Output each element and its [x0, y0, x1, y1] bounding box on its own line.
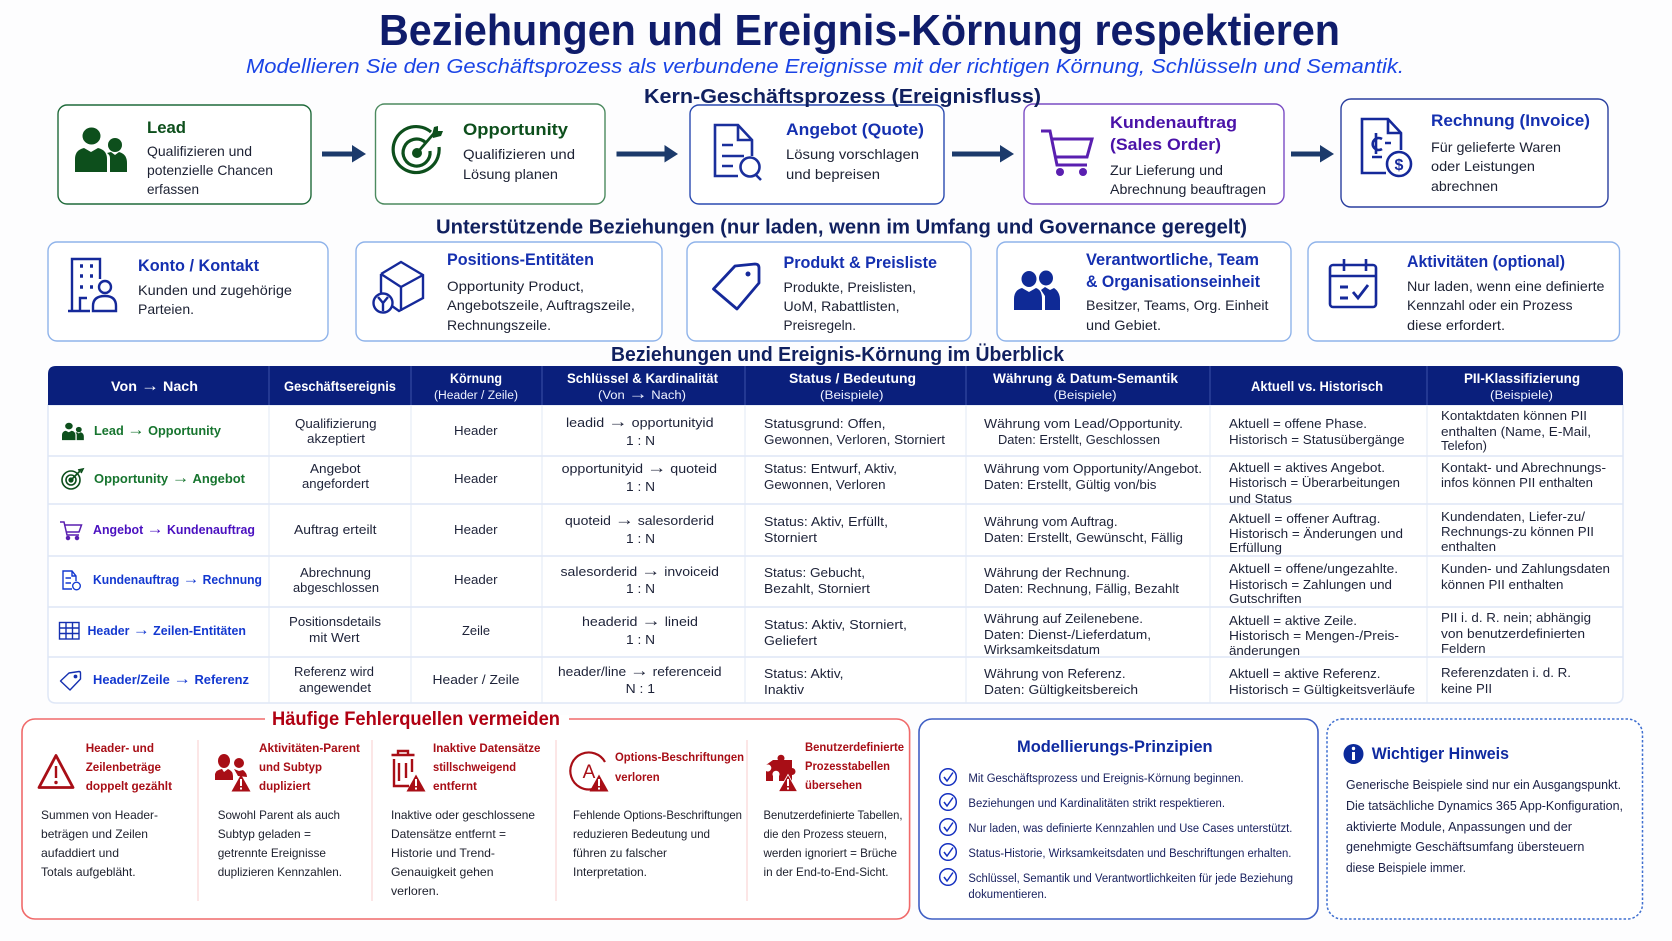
- card: Lead: [58, 105, 311, 204]
- error title: stillschweigend: [433, 760, 516, 774]
- row: Lead to Opportunity: Kontaktdaten können PII: [1441, 409, 1587, 423]
- heading: supporting relationships: Unterstützende Beziehungen (nur laden, wenn im Umfang und Governance geregelt): [436, 216, 1247, 238]
- row: Opportunity to Angebot: Kontakt- und Abrechnungs-: [1441, 461, 1606, 475]
- row: Opportunity to Angebot: [62, 458, 1606, 506]
- heading: Produkt: Produkt & Preisliste: [784, 253, 937, 272]
- panel: important note: [1327, 719, 1642, 919]
- row: Angebot to Kundenauftrag: Erfüllung: [1229, 541, 1282, 555]
- row: Kundenauftrag to Rechnung: Aktuell = offene/ungezahlte.: [1229, 562, 1398, 576]
- row: Lead to Opportunity: leadid → opportunityid: [566, 412, 714, 431]
- text: Rechnung description: abrechnen: [1431, 178, 1498, 194]
- row: Header/Zeile to Referenz: Referenzdaten i. d. R.: [1441, 666, 1571, 680]
- error text: [41, 808, 158, 879]
- icon: shopping cart: [1041, 131, 1092, 176]
- error text: Datensätze entfernt =: [391, 827, 506, 841]
- error title: verloren: [615, 770, 660, 784]
- row: Opportunity to Angebot: und Status: [1229, 492, 1292, 506]
- text: Produkt description: [784, 279, 916, 333]
- error text: aufaddiert und: [41, 846, 119, 860]
- row: Header to Zeilen-Entitäten: 1 : N: [626, 633, 655, 647]
- error title: Options-Beschriftungen: [615, 750, 744, 764]
- heading: table overview: Beziehungen und Ereignis-Körnung im Überblick: [611, 343, 1065, 366]
- text: Opportunity description: Qualifizieren und: [463, 146, 575, 162]
- row label: Angebot → Kundenauftrag: [93, 519, 255, 538]
- row: Angebot to Kundenauftrag: Daten: Erstellt, Gewünscht, Fällig: [984, 531, 1183, 545]
- error: option labels lost: [570, 750, 744, 879]
- title: Beziehungen und Ereignis-Körnung respektieren: [379, 6, 1340, 55]
- row: Lead to Opportunity: [62, 409, 1591, 453]
- heading: Konto: Konto / Kontakt: [138, 256, 259, 275]
- row: Opportunity to Angebot: Status: Entwurf, Aktiv,: [764, 462, 897, 476]
- table header: Geschäftsereignis: [284, 379, 396, 394]
- heading: Verantwortliche: & Organisationseinheit: [1086, 272, 1260, 291]
- row: Header to Zeilen-Entitäten: Wirksamkeitsdatum: [984, 643, 1100, 657]
- error text: Benutzerdefinierte Tabellen,: [764, 808, 902, 822]
- arrow: Kundenauftrag to Rechnung: [1291, 145, 1334, 162]
- error title: [86, 741, 172, 793]
- table header: [48, 366, 1623, 405]
- icon: price tag: [714, 264, 759, 309]
- text: Angebot description: Lösung vorschlagen: [786, 146, 919, 162]
- card: Konto / Kontakt: [48, 242, 328, 341]
- panel: modelling principles: [919, 719, 1318, 919]
- card: Opportunity: [376, 104, 605, 204]
- error text: getrennte Ereignisse: [218, 846, 326, 860]
- icon: document with magnifier: [715, 125, 761, 180]
- error title: Zeilenbeträge: [86, 760, 161, 774]
- text: Angebot description: [786, 146, 919, 182]
- table header: Status / Bedeutung: [789, 371, 916, 386]
- text: principle list: dokumentieren.: [968, 889, 1047, 901]
- heading: Aktivitäten: Aktivitäten (optional): [1407, 252, 1565, 271]
- error text: [391, 808, 535, 898]
- text: Produkt description: Preisregeln.: [784, 317, 856, 333]
- error title: Aktivitäten-Parent: [259, 741, 360, 755]
- row: Header/Zeile to Referenz: Referenz wird: [294, 665, 374, 679]
- row: Lead to Opportunity: Historisch = Statusübergänge: [1229, 433, 1405, 447]
- text: Verantwortliche description: Besitzer, Teams, Org. Einheit: [1086, 297, 1269, 313]
- card: Verantwortliche, Team: [997, 242, 1291, 341]
- heading: modelling principles: Modellierungs-Prinzipien: [1017, 737, 1213, 756]
- row: Header to Zeilen-Entitäten: PII i. d. R. nein; abhängig: [1441, 611, 1591, 625]
- table header: (Beispiele): [1054, 390, 1117, 402]
- text: Rechnung description: oder Leistungen: [1431, 158, 1535, 174]
- icon: cube: [374, 262, 423, 312]
- table header: Körnung: [450, 371, 502, 386]
- row: Header to Zeilen-Entitäten: Zeile: [462, 624, 490, 638]
- error text: Sowohl Parent als auch: [218, 808, 340, 822]
- error text: reduzieren Bedeutung und: [573, 827, 710, 841]
- text: Lead description: Qualifizieren und: [147, 143, 252, 159]
- error title: Inaktive Datensätze: [433, 741, 541, 755]
- heading: Verantwortliche: Verantwortliche, Team: [1086, 250, 1259, 269]
- icon: target: [393, 126, 443, 173]
- row: Header to Zeilen-Entitäten: [60, 611, 1591, 658]
- text: Aktivitäten description: Nur laden, wenn eine definierte: [1407, 278, 1605, 294]
- row: Header/Zeile to Referenz: Währung von Referenz.: [984, 667, 1126, 681]
- row: Kundenauftrag to Rechnung: salesorderid → invoiceid: [560, 561, 719, 580]
- row: Header to Zeilen-Entitäten: Währung auf Zeilenebene.: [984, 612, 1143, 626]
- error: custom tables overlooked: [763, 740, 904, 879]
- text: principle list: Nur laden, was definierte Kennzahlen und Use Cases unterstützt.: [968, 823, 1292, 835]
- row: Header to Zeilen-Entitäten: Status: Aktiv, Storniert,: [764, 618, 907, 632]
- error title: übersehen: [805, 778, 862, 792]
- row: Kundenauftrag to Rechnung: Daten: Rechnung, Fällig, Bezahlt: [984, 582, 1180, 596]
- icon: people small: [62, 423, 84, 440]
- error text: Totals aufgebläht.: [41, 865, 136, 879]
- error: inactive records removed: [391, 741, 541, 898]
- row label: Kundenauftrag → Rechnung: [93, 569, 262, 588]
- icon: building and person: [68, 259, 116, 311]
- error text: Genauigkeit gehen: [391, 865, 494, 879]
- row label: Opportunity → Angebot: [94, 468, 246, 487]
- row: Header to Zeilen-Entitäten: Historisch = Mengen-/Preis-: [1229, 629, 1399, 643]
- row: Angebot to Kundenauftrag: Auftrag erteilt: [294, 523, 377, 537]
- text: note body: genehmigte Geschäftsumfang übersteuern: [1346, 840, 1584, 854]
- row: Lead to Opportunity: Daten: Erstellt, Geschlossen: [998, 433, 1160, 447]
- text: Verantwortliche description: und Gebiet.: [1086, 317, 1161, 333]
- heading: core process: Kern-Geschäftsprozess (Ereignisfluss): [644, 86, 1041, 108]
- error text: [763, 808, 902, 879]
- row: Opportunity to Angebot: opportunityid → quoteid: [562, 458, 717, 477]
- row: Angebot to Kundenauftrag: enthalten: [1441, 540, 1496, 554]
- error title: [433, 741, 541, 793]
- row: Opportunity to Angebot: 1 : N: [626, 480, 655, 494]
- row: Header to Zeilen-Entitäten: änderungen: [1229, 644, 1300, 658]
- row: Opportunity to Angebot: angefordert: [302, 477, 370, 491]
- heading: Lead: Lead: [147, 118, 186, 137]
- text: Angebot description: und bepreisen: [786, 166, 880, 182]
- text: principle list: Beziehungen und Kardinalitäten strikt respektieren.: [968, 798, 1225, 810]
- text: Kundenauftrag description: [1110, 162, 1266, 197]
- text: principle list: [968, 773, 1293, 901]
- table header: Schlüssel & Kardinalität: [567, 371, 718, 386]
- text: Aktivitäten description: [1407, 278, 1605, 333]
- text: Produkt description: UoM, Rabattlisten,: [784, 298, 900, 314]
- table header: Aktuell vs. Historisch: [1251, 379, 1383, 394]
- text: Kundenauftrag description: Zur Lieferung und: [1110, 162, 1223, 178]
- row: Header/Zeile to Referenz: Daten: Gültigkeitsbereich: [984, 683, 1138, 697]
- error text: Subtyp geladen =: [218, 827, 311, 841]
- row: Kundenauftrag to Rechnung: Kunden- und Zahlungsdaten: [1441, 562, 1610, 576]
- row: Kundenauftrag to Rechnung: Währung der Rechnung.: [984, 566, 1130, 580]
- table header: (Beispiele): [820, 390, 884, 402]
- card: Kundenauftrag: [1024, 104, 1284, 204]
- table header: Von → Nach: [111, 376, 198, 395]
- error title: entfernt: [433, 779, 477, 793]
- error title: Prozesstabellen: [805, 759, 890, 773]
- icon: invoice: $: [1395, 157, 1404, 174]
- text: Aktivitäten description: Kennzahl oder ein Prozess: [1407, 297, 1572, 313]
- text: principle list: Schlüssel, Semantik und Verantwortlichkeiten für jede Beziehung: [968, 873, 1293, 885]
- error text: beträgen und Zeilen: [41, 827, 148, 841]
- row: Header/Zeile to Referenz: header/line → referenceid: [558, 661, 722, 680]
- heading: common errors: Häufige Fehlerquellen vermeiden: [272, 709, 560, 730]
- text: Konto description: [138, 282, 292, 317]
- row: Lead to Opportunity: Währung vom Lead/Opportunity.: [984, 417, 1183, 431]
- icon: document small: [63, 571, 80, 590]
- row: Opportunity to Angebot: Historisch = Überarbeitungen: [1229, 476, 1400, 490]
- error text: führen zu falscher: [573, 846, 667, 860]
- heading: Opportunity: Opportunity: [463, 120, 569, 139]
- error text: Fehlende Options-Beschriftungen: [573, 808, 742, 822]
- icon: puzzle with warning: [766, 755, 798, 792]
- row: Header/Zeile to Referenz: angewendet: [299, 681, 372, 695]
- icon: team: [1014, 270, 1060, 310]
- row: Header/Zeile to Referenz: keine PII: [1441, 682, 1492, 696]
- text: Opportunity description: Lösung planen: [463, 166, 558, 182]
- panel: core business process: [58, 99, 1608, 207]
- text: note body: Generische Beispiele sind nur ein Ausgangspunkt.: [1346, 778, 1621, 792]
- row label: Header → Zeilen-Entitäten: [88, 620, 246, 639]
- row: Kundenauftrag to Rechnung: [63, 561, 1610, 606]
- row: Header/Zeile to Referenz: N : 1: [626, 682, 655, 696]
- card: Positions-Entitäten: [356, 242, 662, 341]
- row: Lead to Opportunity: Header: [454, 424, 498, 438]
- row: Opportunity to Angebot: Aktuell = aktives Angebot.: [1229, 461, 1385, 475]
- error title: Benutzerdefinierte: [805, 740, 904, 754]
- error text: Inaktive oder geschlossene: [391, 808, 535, 822]
- row label: Header/Zeile → Referenz: [93, 669, 249, 688]
- card: Produkt & Preisliste: [687, 242, 971, 341]
- text: note body: diese Beispiele immer.: [1346, 861, 1466, 875]
- row: Header/Zeile to Referenz: [60, 661, 1571, 697]
- row: Opportunity to Angebot: infos können PII enthalten: [1441, 476, 1593, 490]
- text: Positions description: Rechnungszeile.: [447, 317, 551, 333]
- text: Lead description: [147, 143, 273, 197]
- error text: in der End-to-End-Sicht.: [764, 865, 888, 879]
- text: Kundenauftrag description: Abrechnung beauftragen: [1110, 181, 1266, 197]
- error text: Interpretation.: [573, 865, 647, 879]
- heading: Kundenauftrag: (Sales Order): [1110, 135, 1221, 154]
- row: Header to Zeilen-Entitäten: Positionsdetails: [289, 615, 381, 629]
- card: Angebot: [690, 105, 944, 204]
- row: Angebot to Kundenauftrag: 1 : N: [626, 532, 655, 546]
- text: principle list: Mit Geschäftsprozess und Ereignis-Körnung beginnen.: [968, 773, 1244, 785]
- text: Rechnung description: [1431, 139, 1561, 194]
- icon: trash with warning: [392, 751, 426, 792]
- row: Kundenauftrag to Rechnung: Status: Gebucht,: [764, 566, 865, 580]
- row: Opportunity to Angebot: Header: [454, 472, 498, 486]
- icon: info: [1344, 744, 1364, 764]
- panel: supporting relationships: [48, 242, 1620, 341]
- table header: Währung & Datum-Semantik: [993, 371, 1178, 386]
- table header: PII-Klassifizierung: [1464, 371, 1580, 386]
- row: Opportunity to Angebot: Gewonnen, Verloren: [764, 478, 886, 492]
- error title: dupliziert: [259, 779, 310, 793]
- row: Header to Zeilen-Entitäten: Geliefert: [764, 634, 818, 648]
- heading: Rechnung: Rechnung (Invoice): [1431, 111, 1590, 130]
- icon: invoice: [1362, 119, 1411, 176]
- error text: Summen von Header-: [41, 808, 158, 822]
- icon: grid: [60, 622, 79, 639]
- row: Header/Zeile to Referenz: Aktuell = aktive Referenz.: [1229, 667, 1380, 681]
- icons: check marks: [940, 769, 956, 885]
- text: Positions description: [447, 278, 635, 333]
- icon: tag small: [60, 672, 80, 690]
- row: Kundenauftrag to Rechnung: Historisch = Zahlungen und: [1229, 578, 1392, 592]
- table header: (Beispiele): [1490, 390, 1553, 402]
- row: Header/Zeile to Referenz: Historisch = Gültigkeitsverläufe: [1229, 683, 1415, 697]
- text: note body: Die tatsächliche Dynamics 365 App-Konfiguration,: [1346, 799, 1623, 813]
- text: Konto description: Parteien.: [138, 301, 194, 317]
- row: Lead to Opportunity: Statusgrund: Offen,: [764, 417, 886, 431]
- subtitle: Modellieren Sie den Geschäftsprozess als verbundene Ereignisse mit der richtigen Körnung, Schlüsseln und Semantik.: [246, 56, 1404, 78]
- icon: target small: [62, 469, 83, 489]
- row: Kundenauftrag to Rechnung: Abrechnung: [300, 566, 371, 580]
- row: Header/Zeile to Referenz: Status: Aktiv,: [764, 667, 844, 681]
- row: Lead to Opportunity: Gewonnen, Verloren, Storniert: [764, 433, 946, 447]
- table header: (Header / Zeile): [434, 390, 518, 402]
- text: Produkt description: Produkte, Preislisten,: [784, 279, 916, 295]
- row: Header/Zeile to Referenz: Header / Zeile: [432, 673, 520, 687]
- row: Header to Zeilen-Entitäten: Daten: Dienst-/Lieferdatum,: [984, 628, 1151, 642]
- text: Positions description: Opportunity Product,: [447, 278, 584, 294]
- card: Aktivitäten: [1308, 242, 1620, 341]
- row: Kundenauftrag to Rechnung: können PII enthalten: [1441, 578, 1564, 592]
- row: Lead to Opportunity: 1 : N: [626, 434, 655, 448]
- row: Header to Zeilen-Entitäten: von benutzerdefinierten: [1441, 627, 1585, 641]
- row: Header to Zeilen-Entitäten: mit Wert: [309, 631, 360, 645]
- error text: werden ignoriert = Brüche: [763, 846, 897, 860]
- heading: Verantwortliche: [1086, 250, 1260, 291]
- row: Kundenauftrag to Rechnung: Bezahlt, Storniert: [764, 582, 871, 596]
- row: Angebot to Kundenauftrag: Rechnungs-zu können PII: [1441, 525, 1594, 539]
- row: Angebot to Kundenauftrag: Storniert: [764, 531, 818, 545]
- text: Positions description: Angebotszeile, Auftragszeile,: [447, 297, 635, 313]
- row: Kundenauftrag to Rechnung: 1 : N: [626, 582, 655, 596]
- icon: calendar: [1330, 259, 1376, 307]
- text: Lead description: erfassen: [147, 181, 199, 197]
- heading: Positions-Entitäten: Positions-Entitäten: [447, 250, 594, 269]
- error title: [615, 750, 744, 784]
- row: Opportunity to Angebot: Angebot: [310, 462, 361, 476]
- arrow: Lead to Opportunity: [322, 145, 366, 162]
- heading: Angebot: Angebot (Quote): [786, 120, 924, 139]
- error title: und Subtyp: [259, 760, 322, 774]
- error: duplicate parent and subtype: [215, 741, 360, 879]
- row: Header to Zeilen-Entitäten: Aktuell = aktive Zeile.: [1229, 614, 1357, 628]
- row: Angebot to Kundenauftrag: quoteid → salesorderid: [565, 510, 714, 529]
- row: Angebot to Kundenauftrag: Historisch = Änderungen und: [1229, 527, 1403, 541]
- icon: people with warning: [215, 754, 250, 792]
- row: Lead to Opportunity: Telefon): [1441, 439, 1487, 453]
- text: Konto description: Kunden und zugehörige: [138, 282, 292, 298]
- arrow: Opportunity to Angebot: [616, 145, 678, 162]
- row: Angebot to Kundenauftrag: Status: Aktiv, Erfüllt,: [764, 515, 888, 529]
- error text: [218, 808, 342, 879]
- row: Angebot to Kundenauftrag: Kundendaten, Liefer-zu/: [1441, 510, 1586, 524]
- icon: people: [75, 128, 127, 172]
- heading: Kundenauftrag: Kundenauftrag: [1110, 113, 1237, 132]
- icon: A with warning: [570, 752, 608, 792]
- row: Kundenauftrag to Rechnung: Gutschriften: [1229, 592, 1302, 606]
- row label: Lead → Opportunity: [94, 420, 221, 439]
- error title: [805, 740, 904, 792]
- table header: (Von → Nach): [598, 384, 686, 403]
- table: relationships overview: [48, 366, 1623, 703]
- text: principle list: Status-Historie, Wirksamkeitsdaten und Beschriftungen erhalten.: [968, 848, 1291, 860]
- panel: common errors: [22, 709, 910, 919]
- text: Verantwortliche description: [1086, 297, 1269, 333]
- error text: [573, 808, 742, 879]
- heading: Kundenauftrag: [1110, 113, 1237, 154]
- row: Lead to Opportunity: Aktuell = offene Phase.: [1229, 417, 1367, 431]
- error text: Historie und Trend-: [391, 846, 495, 860]
- text: Aktivitäten description: diese erfordert.: [1407, 317, 1505, 333]
- row: Kundenauftrag to Rechnung: abgeschlossen: [293, 581, 379, 595]
- row: Lead to Opportunity: enthalten (Name, E-Mail,: [1441, 425, 1591, 439]
- text: Lead description: potenzielle Chancen: [147, 162, 273, 178]
- error title: doppelt gezählt: [86, 779, 172, 793]
- error title: [259, 741, 360, 793]
- row: Opportunity to Angebot: Daten: Erstellt, Gültig von/bis: [984, 478, 1156, 492]
- icon: warning triangle: [39, 756, 73, 788]
- row: Lead to Opportunity: akzeptiert: [307, 432, 366, 446]
- row: Angebot to Kundenauftrag: Aktuell = offener Auftrag.: [1229, 512, 1380, 526]
- error title: Header- und: [86, 741, 154, 755]
- row: Header to Zeilen-Entitäten: headerid → lineid: [582, 611, 698, 630]
- card: Rechnung: [1341, 99, 1608, 207]
- error text: verloren.: [391, 884, 439, 898]
- arrow: Angebot to Kundenauftrag: [952, 145, 1014, 162]
- row: Header to Zeilen-Entitäten: Feldern: [1441, 642, 1486, 656]
- text: Rechnung description: Für gelieferte Waren: [1431, 139, 1561, 155]
- error text: duplizieren Kennzahlen.: [218, 865, 342, 879]
- text: note body: aktivierte Module, Anpassungen und der: [1346, 820, 1572, 834]
- error text: die den Prozess steuern,: [764, 827, 887, 841]
- error: double counted: [39, 741, 172, 879]
- icon: A with warning: A: [583, 762, 596, 783]
- row: Angebot to Kundenauftrag: [60, 510, 1594, 555]
- row: Header/Zeile to Referenz: Inaktiv: [764, 683, 805, 697]
- row: Lead to Opportunity: Qualifizierung: [295, 417, 377, 431]
- row: Opportunity to Angebot: Währung vom Opportunity/Angebot.: [984, 462, 1202, 476]
- row: Angebot to Kundenauftrag: Währung vom Auftrag.: [984, 515, 1118, 529]
- text: note body: [1346, 778, 1623, 875]
- row: Angebot to Kundenauftrag: Header: [454, 523, 498, 537]
- row: Kundenauftrag to Rechnung: Header: [454, 573, 498, 587]
- text: Opportunity description: [463, 146, 575, 182]
- icon: cart small: [60, 522, 82, 540]
- heading: important note: Wichtiger Hinweis: [1372, 744, 1509, 763]
